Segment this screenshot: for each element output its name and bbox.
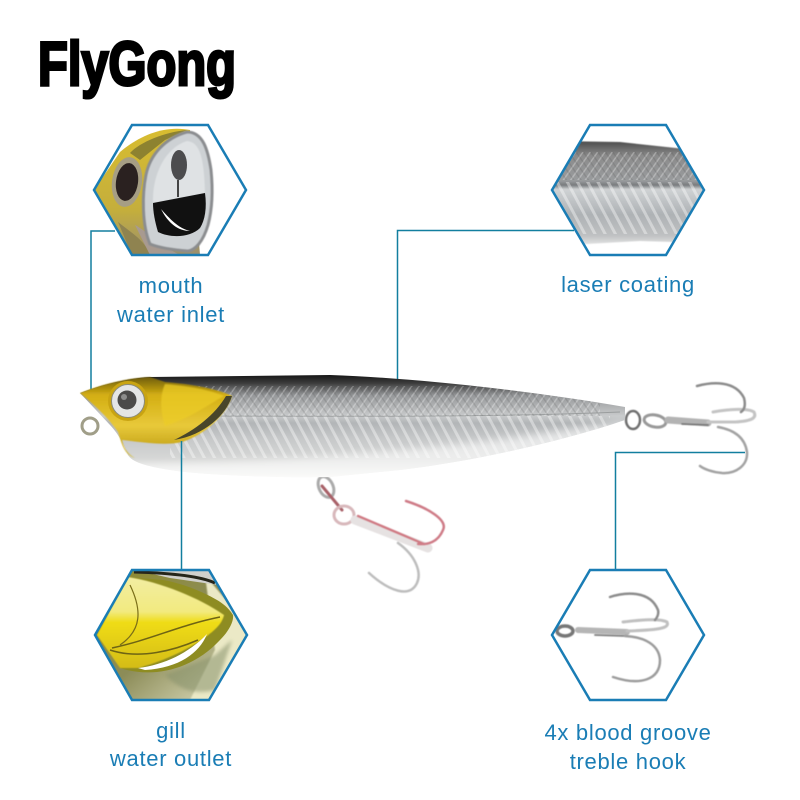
gill shadow	[174, 396, 232, 440]
label: blood groove treble hook: treble hook	[570, 749, 687, 774]
laser scale texture	[144, 386, 624, 478]
lure: main body with hooks	[80, 375, 755, 591]
label: mouth water inlet	[116, 273, 225, 327]
icon: nose ring	[82, 418, 98, 434]
gill yellow plate	[97, 577, 224, 668]
silver mouth face	[143, 132, 212, 251]
icon: eye	[108, 381, 148, 421]
leader line: mouth	[91, 231, 115, 393]
lure head: gold	[80, 377, 232, 458]
leader line: laser coating	[398, 230, 574, 396]
icon: belly treble hook	[315, 474, 444, 591]
label: mouth water inlet: mouth	[139, 273, 203, 298]
icon: tail treble hook	[626, 383, 755, 473]
label: laser coating: laser coating	[561, 272, 695, 297]
label: blood groove treble hook	[544, 720, 712, 774]
detail hexagon: treble hook	[552, 570, 704, 700]
lure body	[80, 375, 625, 477]
pale scale area	[190, 575, 247, 700]
gill highlight	[161, 384, 224, 426]
leader line: hook	[616, 452, 745, 570]
label: mouth water inlet: water inlet	[116, 302, 225, 327]
detail hexagon: laser coating	[552, 125, 704, 255]
gill rim	[119, 577, 234, 672]
label: gill water outlet: water outlet	[109, 746, 232, 771]
label: gill water outlet: gill	[156, 718, 186, 743]
label: gill water outlet	[109, 718, 232, 771]
detail hexagon: mouth	[94, 125, 246, 255]
gill opening	[138, 634, 207, 670]
leader line: gill	[180, 441, 182, 570]
detail hexagon: gill	[95, 570, 247, 700]
title: FlyGong brand: FlyGong	[38, 30, 236, 99]
label: blood groove treble hook: 4x blood groove	[544, 720, 712, 745]
